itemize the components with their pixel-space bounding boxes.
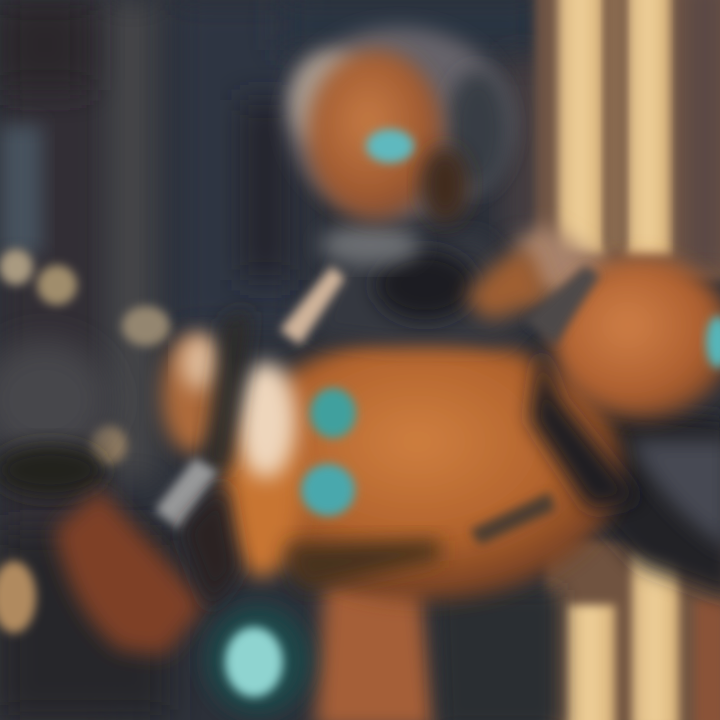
robot torso xyxy=(162,310,620,600)
robot left forearm xyxy=(55,490,205,655)
icon: upper chest light xyxy=(310,388,356,438)
robot chest dark collar xyxy=(280,225,545,345)
icon: glowing hip light xyxy=(206,605,310,715)
background: golden stripes upper right xyxy=(535,0,720,280)
icon: robot eye xyxy=(366,129,414,163)
robot right dark arm xyxy=(545,400,720,600)
robot left hand xyxy=(0,340,110,496)
robot head xyxy=(288,27,512,223)
robot lower dark section xyxy=(435,590,560,720)
robot right shoulder xyxy=(465,225,720,510)
beige bokeh lights xyxy=(0,249,170,633)
icon: lower chest light xyxy=(301,464,355,516)
background: golden stripes lower right xyxy=(545,540,720,720)
robot leg xyxy=(315,580,436,720)
robot wrist band xyxy=(155,458,240,610)
